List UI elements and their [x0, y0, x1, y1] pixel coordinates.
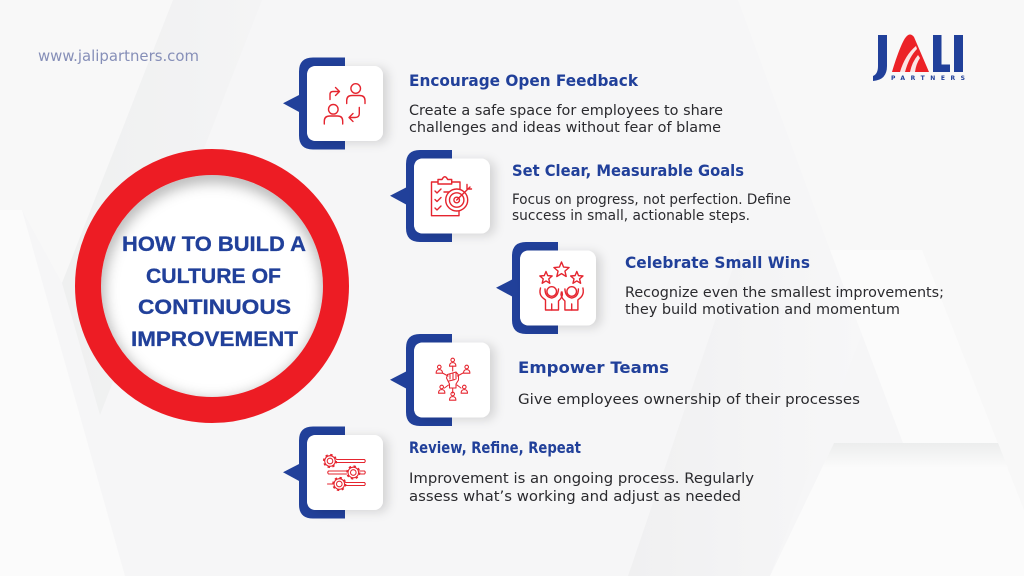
description: Give employees ownership of their processes: [518, 392, 860, 408]
panel: set clear goals: success in small, actionable steps.: [512, 208, 750, 224]
title text: IMPROVEMENT: [131, 327, 298, 351]
panel: encourage open feedback: challenges and ideas without fear of blame: [409, 120, 721, 136]
panel: empower teams: [390, 334, 860, 426]
heading: Review, Refine, Repeat: [409, 438, 581, 457]
badge with celebrating people icon: [496, 242, 596, 334]
description: Create a safe space for employees to share: [409, 103, 723, 119]
heading: Set Clear, Measurable Goals: [512, 161, 744, 180]
heading: Encourage Open Feedback: [409, 71, 638, 90]
badge with sliders icon: [283, 426, 383, 518]
website url: www.jalipartners.com: [38, 47, 199, 65]
description: Recognize even the smallest improvements;: [625, 285, 944, 301]
panel: celebrate small wins: they build motivation and momentum: [625, 302, 900, 318]
badge with clipboard target icon: [390, 150, 490, 242]
title text: [122, 232, 306, 351]
badge with fist network icon: [390, 334, 490, 426]
description: Focus on progress, not perfection. Define: [512, 192, 791, 208]
description: Improvement is an ongoing process. Regularly: [409, 471, 754, 487]
title text: CULTURE OF: [146, 264, 281, 288]
heading: Empower Teams: [518, 358, 669, 377]
heading: Celebrate Small Wins: [625, 253, 810, 272]
panel: celebrate small wins: [496, 242, 944, 334]
central circle title: [88, 162, 336, 410]
logo: JALI Partners: PARTNERS: [891, 75, 965, 82]
panel: set clear goals: [390, 150, 791, 242]
title text: HOW TO BUILD A: [122, 232, 306, 256]
panel: review refine repeat: [283, 426, 754, 518]
panel: review refine repeat: assess what’s working and adjust as needed: [409, 489, 741, 505]
logo: JALI Partners: [873, 34, 965, 82]
badge with feedback icon: [283, 58, 383, 150]
title text: CONTINUOUS: [138, 295, 291, 319]
panel: encourage open feedback: [283, 58, 723, 150]
